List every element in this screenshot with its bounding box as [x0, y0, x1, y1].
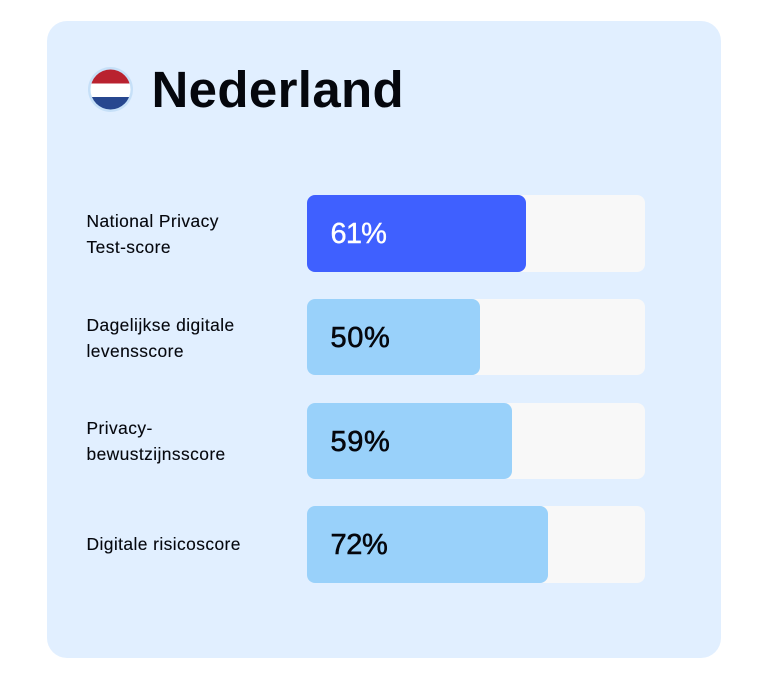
- value: 61%: 61%: [330, 218, 386, 250]
- value: 72%: 72%: [330, 529, 387, 561]
- bar fill: 72%: [307, 506, 548, 582]
- label: Dagelijkse digitale levensscore: Dagelijkse digitale: [86, 314, 235, 334]
- label: Digitale risicoscore: Digitale risicoscore: [86, 534, 241, 554]
- bar fill: 61%: [307, 195, 526, 272]
- label: National Privacy Test-score: National Privacy: [86, 211, 219, 231]
- label: National Privacy Test-score: [86, 211, 219, 257]
- label: Privacy-bewustzijnsscore: [86, 418, 226, 464]
- label: Privacy-bewustzijnsscore: bewustzijnsscore: [86, 444, 226, 464]
- bar fill: 59%: [307, 402, 512, 479]
- label: Dagelijkse digitale levensscore: [86, 314, 235, 360]
- bar: Privacy-bewustzijnsscore 59%: [307, 402, 645, 479]
- label: Dagelijkse digitale levensscore: levensscore: [86, 340, 184, 360]
- label: Privacy-bewustzijnsscore: Privacy-: [86, 418, 153, 438]
- bar: Dagelijkse digitale levensscore 50%: [307, 298, 645, 375]
- bar fill: 50%: [307, 298, 480, 375]
- label: National Privacy Test-score: Test-score: [86, 237, 171, 257]
- icon: Dutch flag: [88, 67, 133, 112]
- value: 59%: 59%: [330, 426, 390, 458]
- value: 50%: 50%: [330, 322, 390, 354]
- bar: Digitale risicoscore 72%: [307, 506, 645, 582]
- bar: National Privacy Test-score 61%: [307, 195, 645, 272]
- title: Nederland: [152, 61, 404, 118]
